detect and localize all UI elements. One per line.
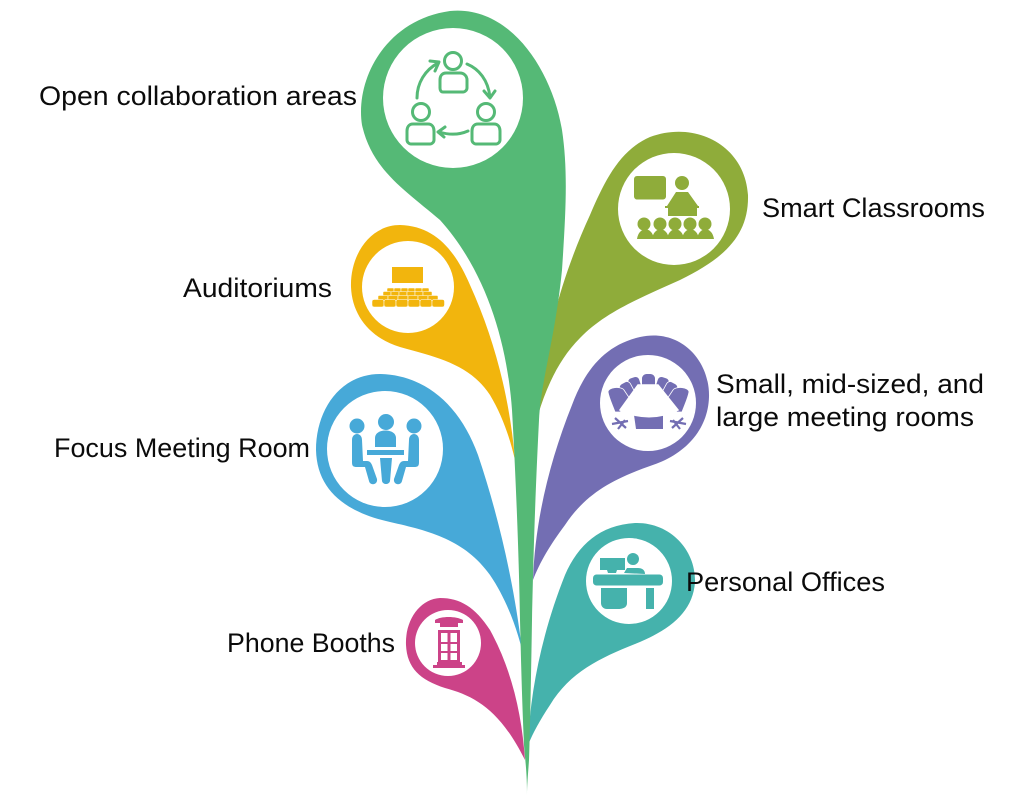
icon: auditorium seats xyxy=(372,267,444,307)
label: open collaboration areas: Open collaboration areas xyxy=(39,81,357,111)
label: smart classrooms: Smart Classrooms xyxy=(762,193,985,223)
petal: focus meeting room xyxy=(316,374,522,650)
icon: people at table xyxy=(350,414,422,484)
label: auditoriums: Auditoriums xyxy=(183,273,332,303)
petal: auditoriums xyxy=(351,225,515,460)
petal: meeting rooms xyxy=(533,335,709,580)
label: focus meeting room: Focus Meeting Room xyxy=(54,433,310,463)
icon: collaboration cycle xyxy=(407,52,500,144)
icon: classroom xyxy=(634,176,714,239)
label: small, mid-sized, and large meeting rooms xyxy=(716,369,984,432)
icon: phone booth xyxy=(433,617,465,668)
petal: smart classrooms xyxy=(538,132,748,415)
icon: conference table xyxy=(608,374,689,429)
label: phone booths: Phone Booths xyxy=(227,628,395,658)
petal: personal offices xyxy=(528,523,695,745)
label: personal offices: Personal Offices xyxy=(686,567,885,597)
icon: office desk xyxy=(593,553,663,609)
petal: phone booths xyxy=(406,598,525,760)
label: small, mid-sized, and large meeting rooms: Small, mid-sized, and xyxy=(716,369,984,399)
petal: open collaboration areas with stem xyxy=(361,11,566,795)
label: small, mid-sized, and large meeting rooms: large meeting rooms xyxy=(716,402,974,432)
